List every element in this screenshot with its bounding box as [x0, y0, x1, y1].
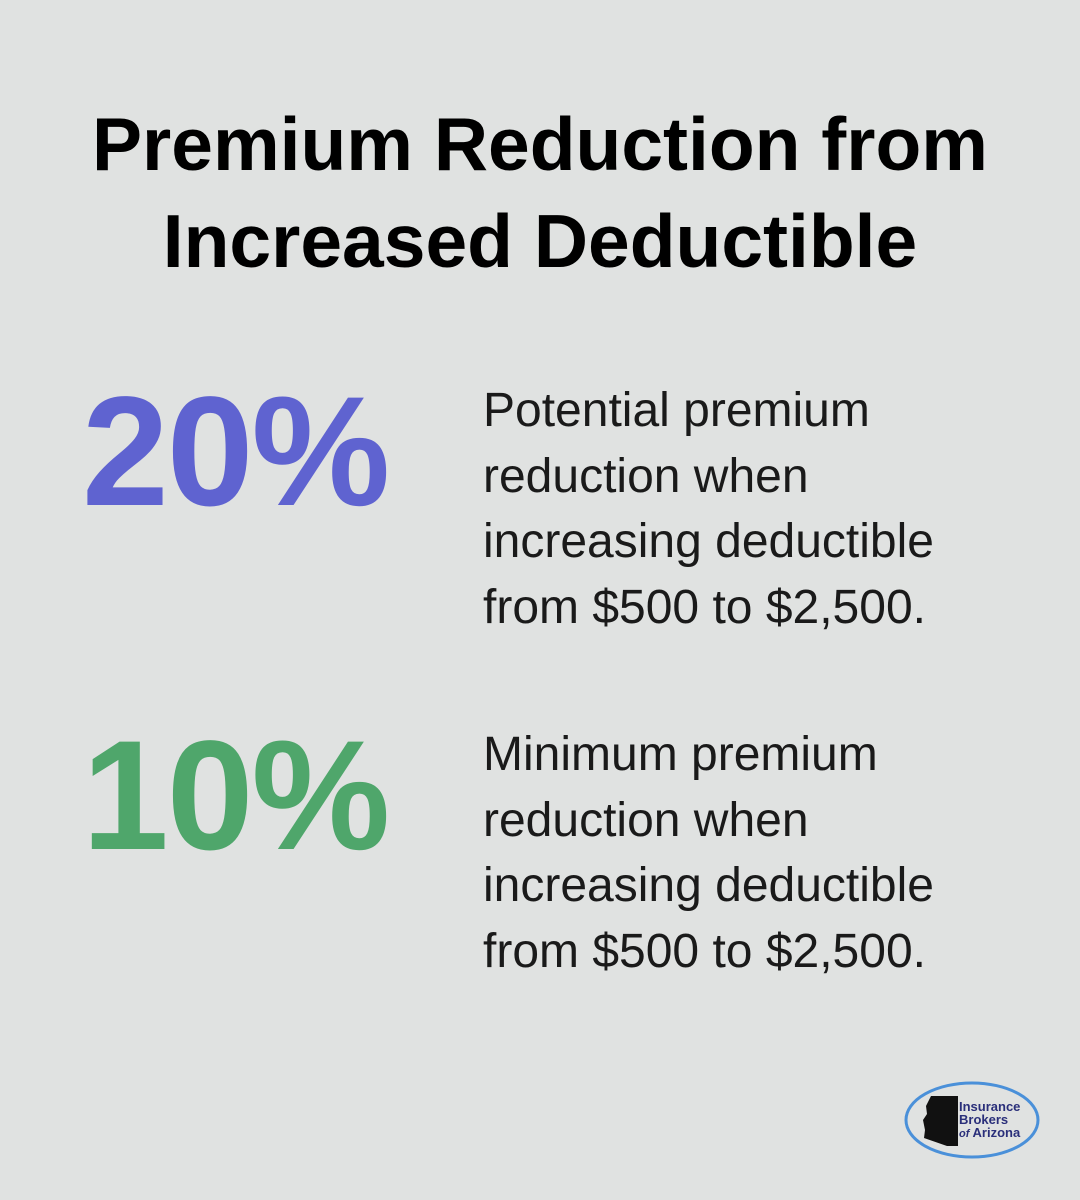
stat: 20%: 20% [82, 365, 388, 539]
text: 10% description: increasing deductible [483, 859, 934, 912]
text: 10% description: Minimum premium [483, 728, 878, 781]
text: 20% description: increasing deductible [483, 515, 934, 568]
text: 10% description [483, 728, 934, 978]
stat: 10%: 10% [82, 709, 388, 883]
text: 10% description: reduction when [483, 794, 809, 846]
text: 20% description: Potential premium [483, 384, 870, 437]
logo: Insurance Brokers of Arizona: of Arizona [959, 1125, 1021, 1140]
logo: Insurance Brokers of Arizona [904, 1082, 1040, 1158]
title: Increased Deductible [163, 199, 917, 283]
text: 20% description [483, 384, 934, 634]
title [92, 102, 988, 283]
logo: Insurance Brokers of Arizona: Brokers [959, 1112, 1008, 1127]
title: Premium Reduction from [92, 102, 988, 186]
logo: Insurance Brokers of Arizona: Insurance [959, 1099, 1020, 1114]
text: 20% description: reduction when [483, 450, 809, 502]
text: 20% description: from $500 to $2,500. [483, 580, 926, 634]
text: 10% description: from $500 to $2,500. [483, 924, 926, 978]
